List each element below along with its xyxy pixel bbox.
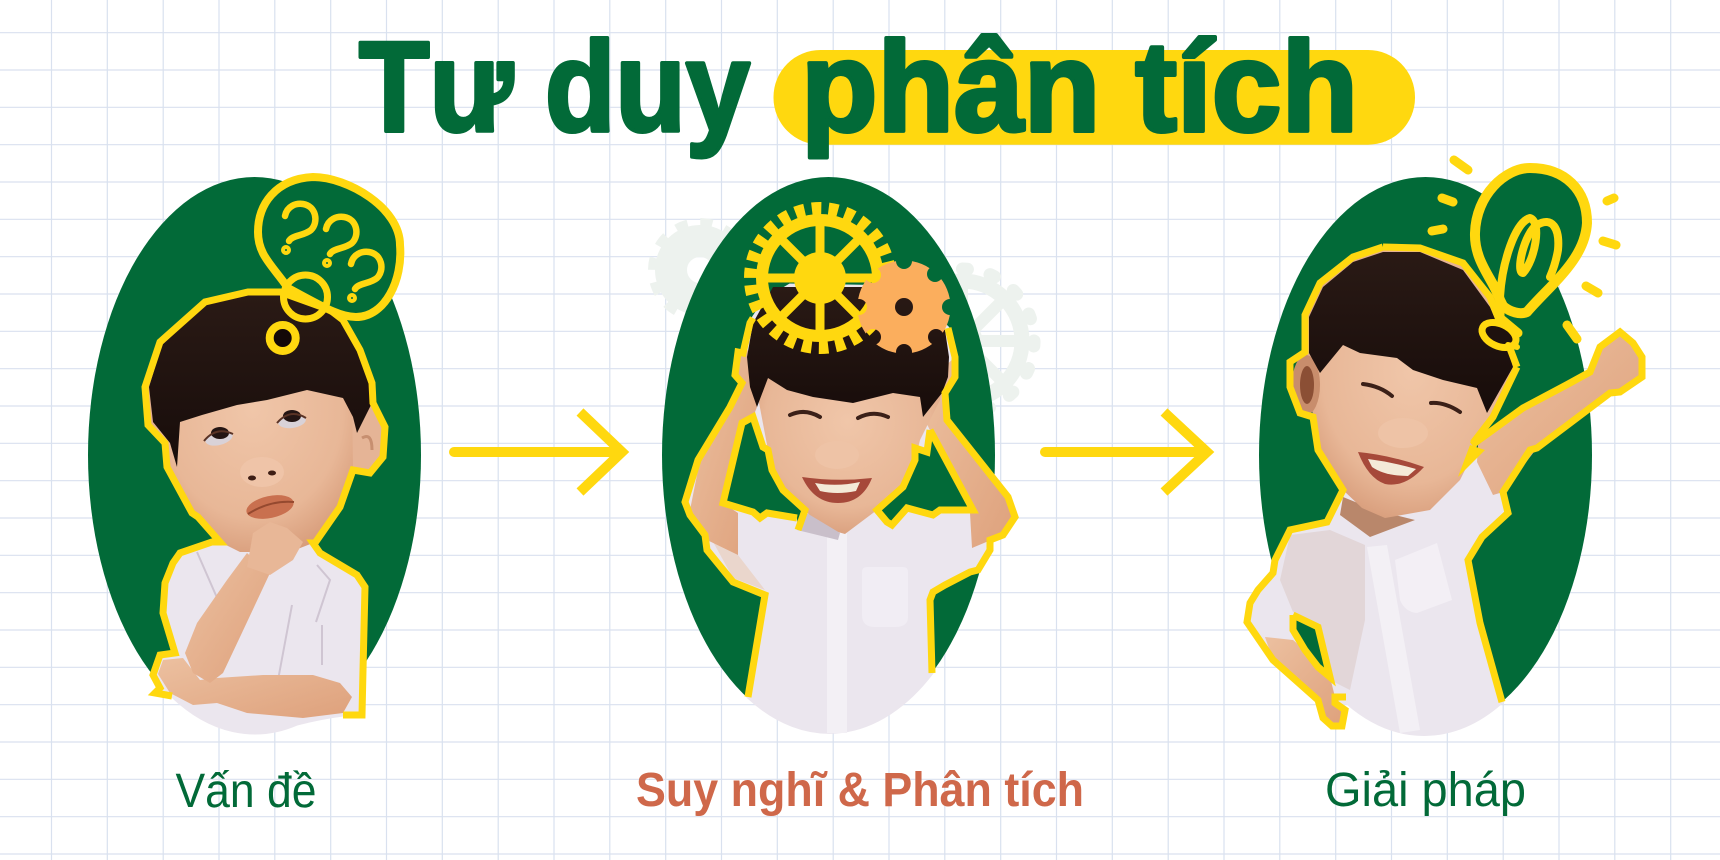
yellow gear [750, 208, 890, 348]
title text: phân tích: phân tích [801, 16, 1358, 159]
faint gear left [653, 223, 747, 317]
arrow: thinking to solution [1045, 412, 1207, 492]
bulb glass [1475, 168, 1587, 313]
boy with raised fist [1247, 247, 1642, 734]
thought circles [284, 275, 328, 319]
question mark 2 [325, 217, 356, 265]
title highlight pill [774, 50, 1415, 145]
hand on hip arm [1265, 637, 1345, 726]
right arm skin [925, 357, 1015, 548]
outline [685, 318, 1015, 697]
eyes [790, 412, 888, 418]
crossed arm [158, 658, 352, 718]
green oval 1 [88, 177, 421, 733]
mouth [244, 491, 296, 523]
shirt [145, 292, 385, 733]
head skin [1305, 250, 1517, 518]
light rays [1432, 160, 1616, 339]
orange gear [858, 260, 950, 354]
light bulb [1432, 160, 1616, 353]
collar shadow [797, 512, 840, 540]
question mark 3 [350, 252, 381, 300]
shirt pocket [1395, 543, 1452, 613]
label: Suy nghĩ & Phân tích: Suy nghĩ & Phân tích [636, 764, 1084, 817]
raised forearm and fist [185, 522, 303, 683]
green gap right of head [877, 430, 973, 525]
panel: problem [88, 177, 421, 733]
shirt shading [1280, 530, 1365, 690]
left eye [204, 427, 234, 448]
outline [1247, 247, 1642, 726]
title [359, 16, 1415, 159]
faint background gears [653, 223, 1034, 413]
hair [1309, 252, 1513, 413]
label: Vấn đề: Vấn đề [176, 765, 316, 818]
filament [1500, 218, 1558, 297]
mouth [1358, 452, 1424, 485]
label: Giải pháp: Giải pháp [1325, 764, 1526, 817]
bulb base [1478, 300, 1520, 353]
hair [747, 287, 949, 417]
question mark 1 [284, 204, 315, 252]
yellow wedge at shoulder [1458, 445, 1485, 477]
hair [149, 295, 375, 467]
thought bubble with question marks [258, 177, 400, 351]
sleeve stains [712, 540, 765, 590]
boy thinking [145, 292, 385, 733]
left arm skin [690, 350, 757, 555]
shirt [1247, 450, 1508, 734]
bubble outline [258, 177, 400, 317]
ear [1292, 355, 1320, 415]
outline [145, 292, 385, 715]
nose [240, 457, 284, 487]
green oval 3 [1259, 177, 1592, 733]
head skin [145, 292, 360, 552]
raised arm [1477, 332, 1642, 495]
faint gear right [890, 269, 1034, 413]
green oval 2 [662, 177, 995, 733]
nose [815, 441, 859, 469]
eyes [1363, 384, 1460, 412]
arrow: problem to thinking [454, 412, 622, 492]
panel: thinking and analysis [662, 177, 1015, 733]
shirt placket [1367, 545, 1420, 733]
neck [1340, 497, 1415, 537]
shirt pocket [862, 567, 908, 627]
shirt folds [197, 552, 330, 680]
green gap at hip [1293, 615, 1330, 677]
boy with hands on head [685, 285, 1015, 733]
shirt placket [827, 530, 847, 733]
mouth [802, 477, 872, 503]
shirt [685, 285, 1015, 732]
title text: Tư duy: Tư duy [359, 16, 750, 159]
nose [1378, 418, 1428, 448]
green gap left of head [723, 417, 805, 530]
ear [352, 400, 385, 473]
head skin [750, 330, 945, 534]
right eye [277, 410, 307, 430]
panel: solution [1247, 160, 1642, 734]
